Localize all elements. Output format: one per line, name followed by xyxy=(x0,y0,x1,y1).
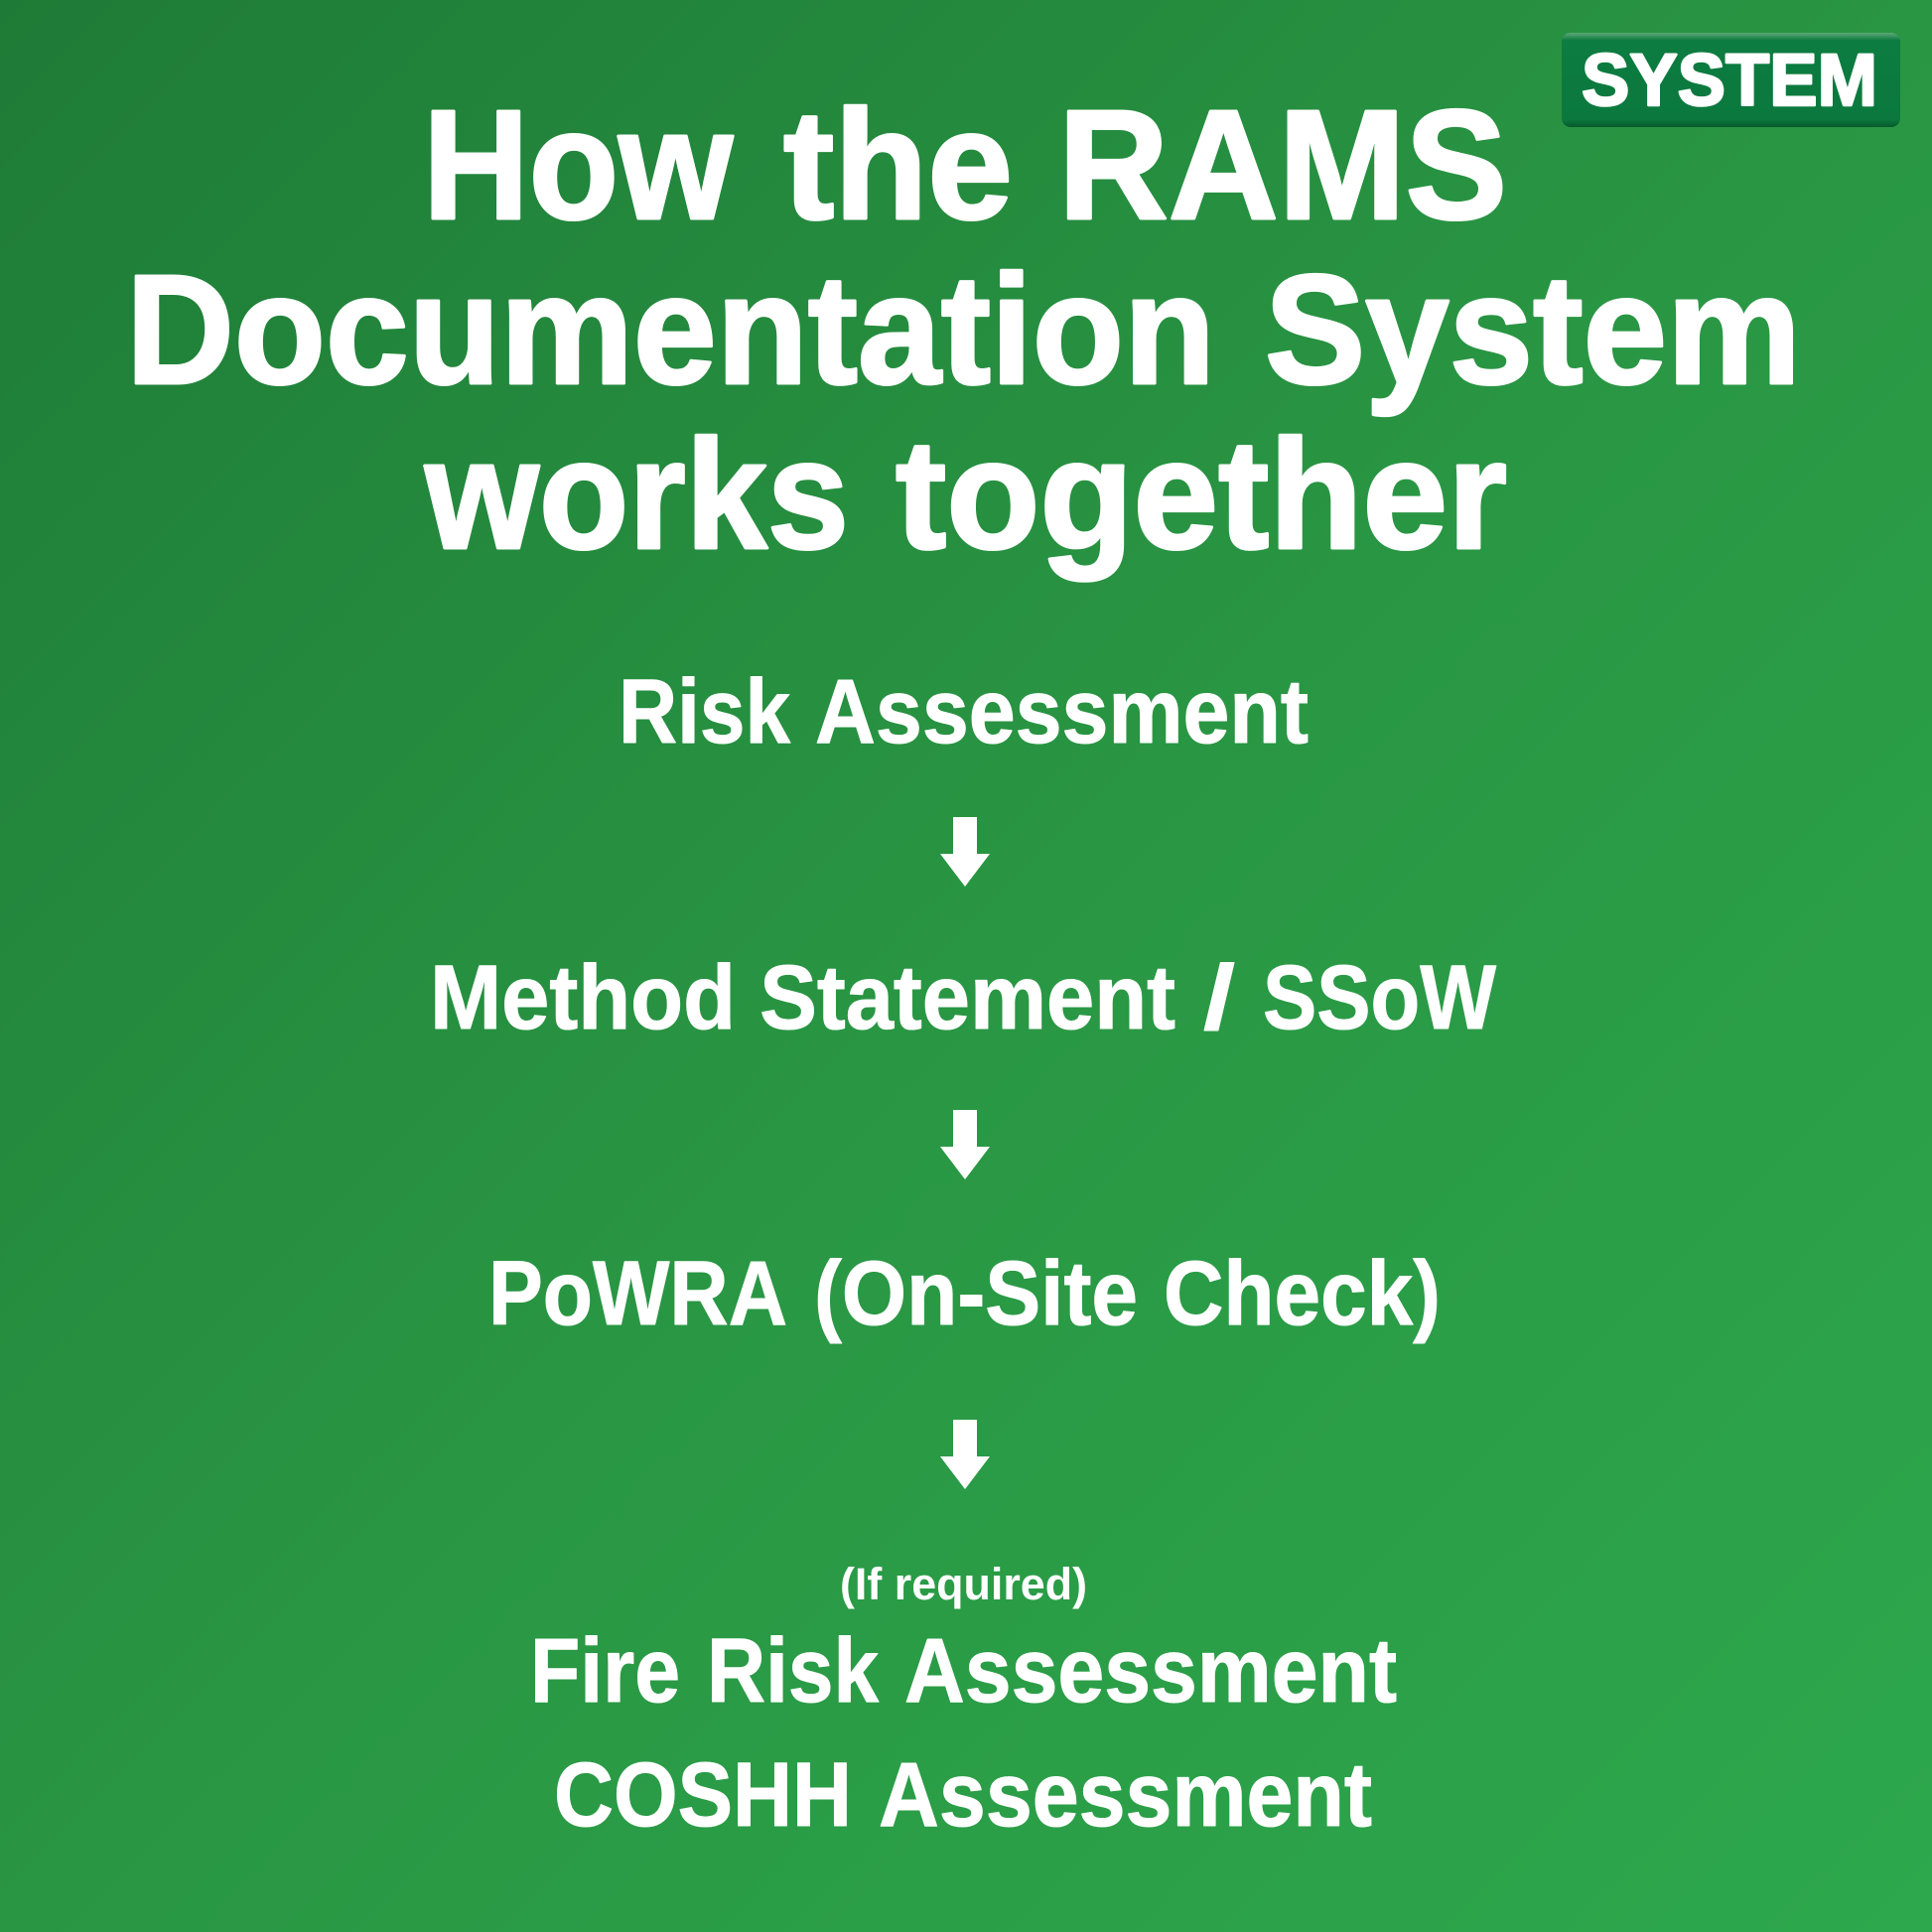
step: COSHH Assessment: Assessment xyxy=(879,1744,1372,1846)
title: together xyxy=(896,408,1507,582)
step: Fire Risk Assessment xyxy=(530,1620,1397,1722)
arrow 3 xyxy=(940,1420,990,1489)
arrow 1 xyxy=(940,817,990,887)
title: the xyxy=(783,78,1013,252)
step: PoWRA (On-Site Check): Check) xyxy=(1164,1243,1441,1344)
title: How xyxy=(423,78,734,252)
step: Fire Risk Assessment: Fire xyxy=(530,1620,680,1722)
note: If required: (If required) xyxy=(840,1559,1087,1609)
step: Risk Assessment: Risk xyxy=(619,661,791,762)
step: Risk Assessment: Assessment xyxy=(815,661,1309,762)
title: RAMS xyxy=(1058,78,1507,252)
step: Method Statement / SSoW: SSoW xyxy=(1263,947,1496,1048)
title: Documentation xyxy=(126,243,1215,417)
step: COSHH Assessment xyxy=(554,1744,1372,1846)
step: Method Statement / SSoW: Method Statement xyxy=(430,947,1175,1048)
step: PoWRA (On-Site Check) xyxy=(488,1243,1441,1344)
arrow 2 xyxy=(940,1110,990,1179)
step: Fire Risk Assessment: Risk xyxy=(707,1620,880,1722)
step: PoWRA (On-Site Check): PoWRA xyxy=(488,1243,787,1344)
step: Method Statement / SSoW: / xyxy=(1203,947,1235,1048)
step: PoWRA (On-Site Check): (On-Site xyxy=(814,1243,1138,1344)
step: Risk Assessment xyxy=(619,661,1309,762)
title: works xyxy=(424,408,849,582)
title: System xyxy=(1265,243,1801,417)
title xyxy=(126,78,1801,582)
badge: SYSTEM: SYSTEM xyxy=(1582,39,1877,121)
step: Fire Risk Assessment: Assessment xyxy=(904,1620,1397,1722)
step: COSHH Assessment: COSHH xyxy=(554,1744,852,1846)
